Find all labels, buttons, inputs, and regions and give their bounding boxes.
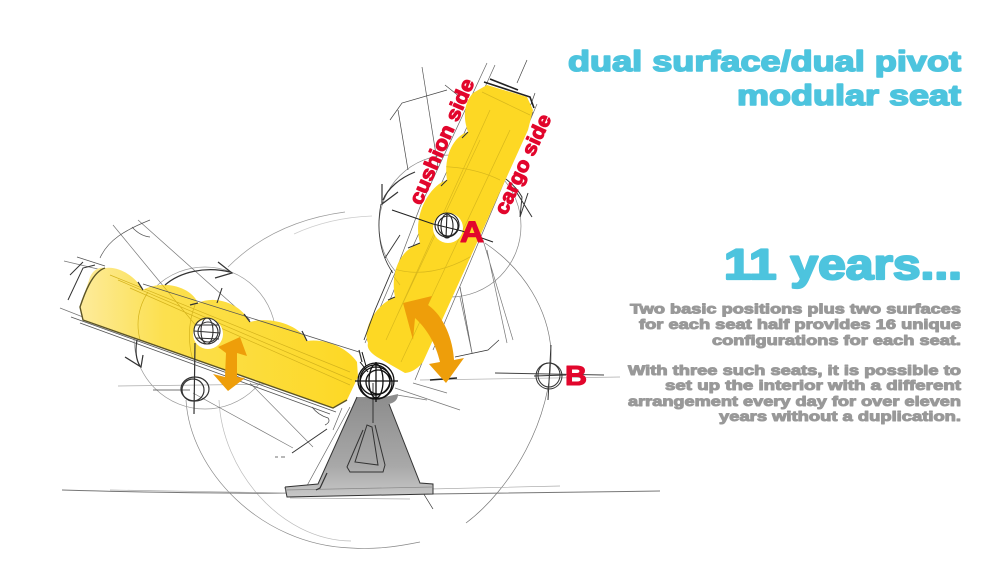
orange curved arrow — [403, 296, 464, 383]
text block: three seats: With three such seats, it is possible to — [628, 362, 961, 378]
lower seat half — [68, 256, 363, 414]
pivot A — [392, 210, 493, 243]
text block: positions: configurations for each seat. — [712, 332, 961, 348]
label: cushion side: cushion side — [405, 75, 479, 208]
pivot: lower seat — [193, 288, 223, 349]
text block: three seats: years without a duplication. — [719, 408, 961, 424]
text block: positions: Two basic positions plus two surfaces — [630, 300, 961, 316]
orange up-down arrow — [213, 337, 247, 391]
heading: 11 years: 11 years... — [724, 241, 962, 289]
text block: three seats: arrangement every day for over eleven — [628, 393, 961, 409]
main pivot — [355, 352, 398, 402]
upper seat half — [364, 79, 534, 373]
base pedestal — [285, 383, 433, 497]
title: modular seat — [737, 80, 961, 112]
text block: three seats: set up the interior with a different — [665, 377, 961, 393]
rotation arrow: seat A — [379, 172, 415, 273]
title — [568, 46, 961, 112]
text block: positions: for each seat half provides 16 unique — [639, 316, 961, 332]
rotation arrow: lower seat — [125, 262, 232, 367]
title: dual surface/dual pivot — [568, 46, 961, 78]
label: cargo side: cargo side — [491, 111, 556, 218]
text block: three seats — [628, 362, 961, 424]
label: B: B — [565, 360, 587, 391]
text block: positions — [630, 300, 961, 348]
pivot B — [534, 345, 566, 400]
label: A: A — [460, 216, 484, 249]
construction sketch lines — [60, 60, 660, 548]
pivot: lower sketch — [181, 343, 209, 414]
